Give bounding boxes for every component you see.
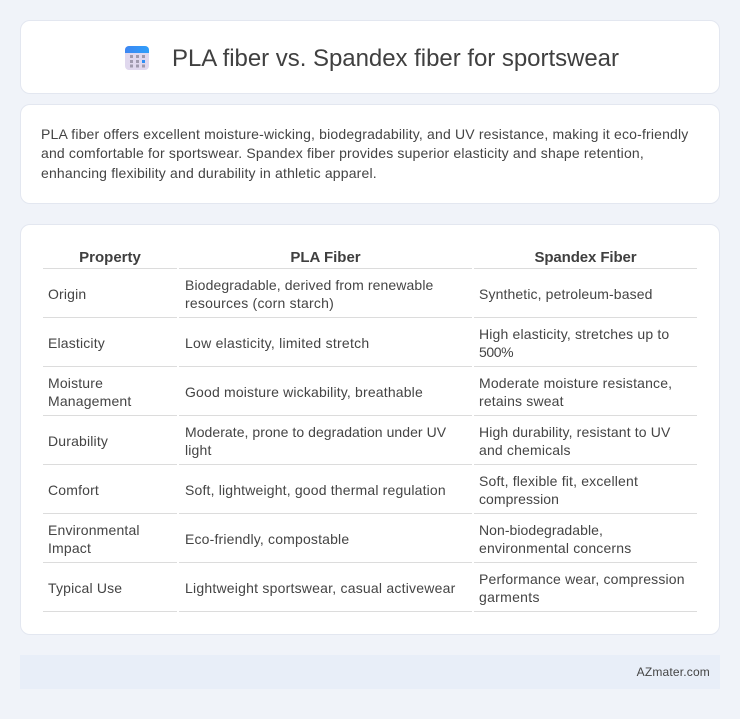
row: comfort: Soft, flexible fit, excellent	[479, 473, 638, 489]
panel: title card	[20, 20, 720, 94]
row: durability: and chemicals	[479, 442, 571, 458]
row: typical use: Performance wear, compression	[479, 571, 685, 587]
panel: comparison table	[20, 224, 720, 635]
row: origin: Biodegradable, derived from renewable	[185, 277, 433, 293]
row: typical use	[48, 571, 685, 605]
row: environmental impact: Non-biodegradable,	[479, 522, 603, 538]
row: moisture management: Management	[48, 393, 131, 409]
table header: Spandex Fiber	[534, 249, 637, 266]
row: durability: Durability	[48, 433, 108, 449]
table header: Property	[79, 249, 141, 266]
row: durability: Moderate, prone to degradation under UV	[185, 424, 446, 440]
row: environmental impact	[48, 522, 631, 556]
row: durability: light	[185, 442, 212, 458]
row: elasticity: Elasticity	[48, 335, 105, 351]
icon: calendar grid	[125, 46, 149, 70]
row: environmental impact: Eco-friendly, compostable	[185, 531, 349, 547]
summary text	[41, 126, 688, 181]
row: typical use: garments	[479, 589, 540, 605]
row: comfort: Soft, lightweight, good thermal regulation	[185, 482, 446, 498]
row: elasticity: High elasticity, stretches up to	[479, 326, 669, 342]
row: environmental impact: Environmental	[48, 522, 140, 538]
row: origin	[48, 277, 653, 311]
row: elasticity: 500%	[479, 344, 513, 360]
row: typical use: Typical Use	[48, 580, 122, 596]
row: moisture management: Moderate moisture resistance,	[479, 375, 672, 391]
row: durability: High durability, resistant to UV	[479, 424, 670, 440]
row: durability	[48, 424, 670, 458]
row: origin: Synthetic, petroleum-based	[479, 286, 653, 302]
row: origin: Origin	[48, 286, 86, 302]
panel: summary	[20, 104, 720, 204]
row: environmental impact: environmental concerns	[479, 540, 631, 556]
footer bar	[20, 655, 720, 689]
title: PLA fiber vs. Spandex fiber for sportswear	[172, 45, 619, 72]
row: moisture management: Good moisture wickability, breathable	[185, 384, 423, 400]
summary text: PLA fiber offers excellent moisture-wicking, biodegradability, and UV resistance, making it eco-friendly	[41, 126, 688, 142]
row: comfort: compression	[479, 491, 559, 507]
row: elasticity	[48, 326, 669, 360]
row: elasticity: Low elasticity, limited stretch	[185, 335, 369, 351]
row: moisture management: retains sweat	[479, 393, 564, 409]
row: moisture management: Moisture	[48, 375, 103, 391]
row: comfort: Comfort	[48, 482, 99, 498]
row: typical use: Lightweight sportswear, casual activewear	[185, 580, 456, 596]
footer credit: AZmater.com	[637, 665, 710, 679]
summary text: enhancing flexibility and durability in athletic apparel.	[41, 164, 377, 180]
table header: PLA Fiber	[290, 249, 361, 266]
row: moisture management	[48, 375, 672, 409]
row: environmental impact: Impact	[48, 540, 91, 556]
summary text: and comfortable for sportswear. Spandex fiber provides superior elasticity and shape retention,	[41, 145, 644, 161]
row: comfort	[48, 473, 638, 507]
row: origin: resources (corn starch)	[185, 295, 334, 311]
table header	[79, 249, 637, 266]
